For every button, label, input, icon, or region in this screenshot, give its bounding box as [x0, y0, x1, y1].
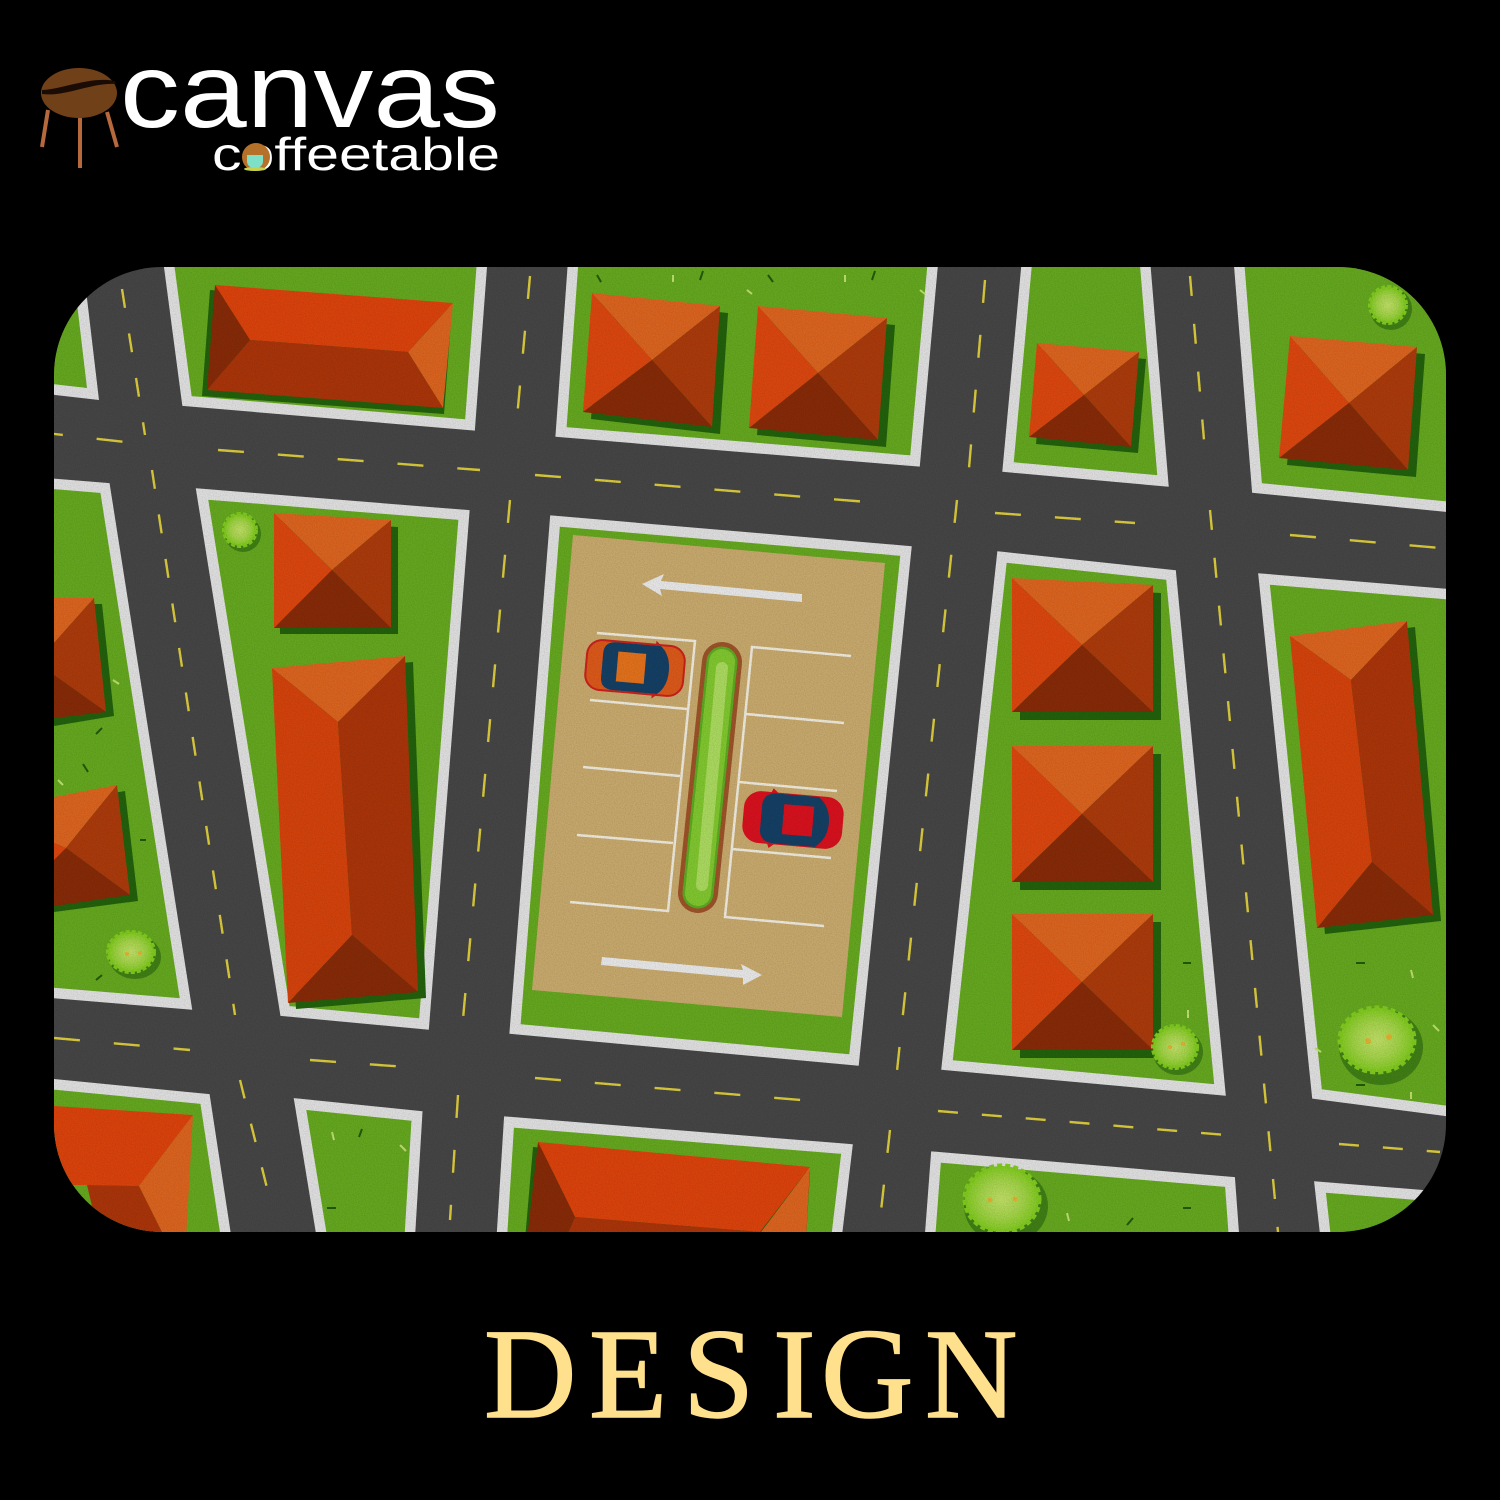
- roof: top house 4: [1279, 336, 1417, 470]
- roof: long vertical house: [272, 656, 418, 1003]
- logo word: canvas: canvas: [120, 32, 500, 150]
- roof: top house 3: [1029, 343, 1139, 447]
- bush: bottom: [962, 1164, 1048, 1232]
- roads: [54, 267, 1446, 1232]
- roof: top house 1: [583, 293, 720, 427]
- icon: coffee cup: [242, 143, 270, 171]
- bush: large right: [1339, 1008, 1423, 1085]
- panel: parking lot: [532, 535, 885, 1017]
- sand surface: [532, 535, 885, 1017]
- grass tufts: [58, 271, 1439, 1225]
- roof: right column house 2: [1012, 746, 1153, 882]
- road centre dashes: [37, 432, 1440, 1102]
- arrow: left: [642, 574, 802, 602]
- roof: right column house 1: [1012, 578, 1153, 712]
- fabric grain: [54, 267, 1446, 1232]
- roof: top left long house: [207, 285, 453, 408]
- caption: DESIGN: DESIGN: [484, 1303, 1017, 1445]
- grass blocks: [30, 250, 1470, 1250]
- logo word: coffeetable: coffeetable: [212, 128, 500, 180]
- roof: right column house 3: [1012, 914, 1153, 1050]
- car: orange: [584, 635, 686, 701]
- icon: coffee bean table: [41, 68, 117, 168]
- bush: top right corner: [1370, 287, 1412, 330]
- panel: neighbourhood map mat: [30, 250, 1470, 1250]
- roof: bottom left house: [54, 1106, 193, 1240]
- roof: small square house: [274, 513, 391, 628]
- roof: left edge house 2: [54, 785, 130, 906]
- roof: top house 2: [749, 306, 887, 440]
- parking bay lines: [570, 633, 851, 926]
- bush: left block: [108, 932, 161, 979]
- logo: canvas coffeetable: [41, 32, 500, 180]
- roof: left edge house 1: [54, 598, 106, 718]
- bush: top left block: [224, 514, 261, 552]
- roof: bottom centre house: [527, 1142, 810, 1240]
- roof shadows: [54, 290, 1441, 1240]
- car: red: [741, 786, 845, 854]
- arrow: right: [601, 957, 762, 985]
- roof: far right long house: [1290, 621, 1433, 928]
- planter median: [698, 662, 722, 893]
- bush: beside right column: [1153, 1026, 1203, 1075]
